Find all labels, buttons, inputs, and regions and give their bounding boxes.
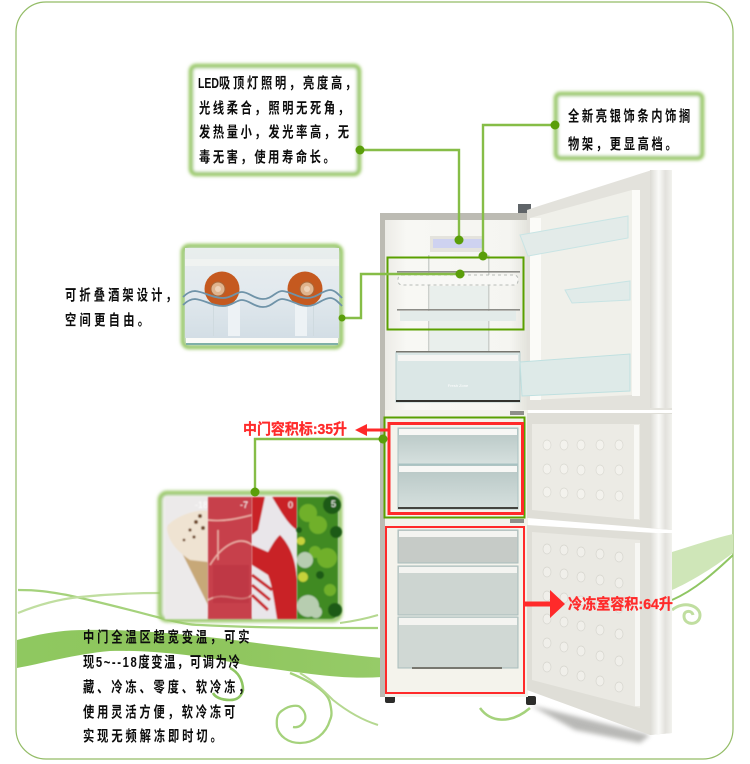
glass shelves xyxy=(397,271,520,321)
door shadow xyxy=(530,705,650,743)
middle door xyxy=(527,413,672,530)
callout: LED light: 发热量小，发光率高，无 xyxy=(199,122,349,140)
photo: coffee: -18 xyxy=(195,500,208,510)
wine rack wires xyxy=(183,290,342,307)
top compartment interior xyxy=(385,220,527,410)
text: wine rack description: 可折叠酒架设计， xyxy=(65,285,177,303)
highlight frame: middle compartment red xyxy=(389,424,522,514)
text: wine rack description xyxy=(65,285,177,328)
ceiling LED light xyxy=(430,236,484,252)
wine bottle right xyxy=(288,272,322,306)
middle drawers xyxy=(398,428,518,509)
text: middle zone description xyxy=(83,627,250,744)
door shelf bottom xyxy=(520,354,630,396)
photo: meat xyxy=(208,497,252,619)
connector: LED light xyxy=(360,150,459,240)
rear rails xyxy=(428,255,490,355)
fridge feet xyxy=(385,694,536,705)
text: middle zone description: 中门全温区超宽变温，可实 xyxy=(83,627,250,645)
callout: LED light: 光线柔合，照明无死角， xyxy=(199,98,349,116)
connector: wine rack xyxy=(342,274,460,318)
callout: LED light: LED xyxy=(198,74,219,91)
top crisper drawer xyxy=(396,351,520,402)
callout: silver trim shelf: 全新亮银饰条内饰搁 xyxy=(568,106,690,124)
refrigerator xyxy=(380,170,672,743)
hinge xyxy=(510,204,531,523)
cabinet top and side trim xyxy=(380,213,528,697)
text: middle zone description: 使用灵活方便，软冷冻可 xyxy=(83,702,235,720)
wine bottle left xyxy=(204,272,240,306)
decorative green swirl background xyxy=(17,534,733,743)
photo: lobster: 0 xyxy=(288,500,293,510)
door dimples xyxy=(543,440,623,501)
photo: broccoli xyxy=(296,496,342,619)
door shelf middle xyxy=(565,281,630,303)
photo: coffee xyxy=(165,497,208,619)
cabinet body xyxy=(380,213,528,697)
highlight frame: middle compartment green xyxy=(384,418,524,518)
highlight frame: freezer xyxy=(386,527,524,693)
connector: zone drawers xyxy=(255,439,383,492)
text: middle zone description: 实现无频解冻即时切。 xyxy=(83,726,222,744)
callout: LED light xyxy=(191,66,359,174)
connector: shelf trim xyxy=(483,125,555,256)
door shelf top xyxy=(520,216,628,256)
text: wine rack description: 空间更自由。 xyxy=(65,310,149,328)
text: middle zone description: 藏、冷冻、零度、软冷冻， xyxy=(83,677,250,695)
callout: LED light: 吸顶灯照明，亮度高， xyxy=(219,73,356,91)
top door xyxy=(520,170,672,410)
label: middle volume: 中门容积标:35升 xyxy=(243,420,347,438)
top crisper drawer: Fresh Zone xyxy=(448,383,469,388)
photo: lobster xyxy=(252,497,297,619)
panel: wine rack photo xyxy=(183,246,342,347)
arrow: freezer volume xyxy=(524,590,565,618)
panel: food temperature photo xyxy=(160,493,342,620)
text: middle zone description: 现5~--18度变温，可调为冷 xyxy=(83,652,240,670)
photo: meat: -7 xyxy=(240,500,248,510)
freezer door dimples xyxy=(543,544,623,692)
rear grid panel xyxy=(430,286,488,352)
label: freezer volume: 冷冻室容积:64升 xyxy=(568,595,673,613)
connector lines and dots xyxy=(250,120,560,496)
freezer door xyxy=(527,525,672,735)
callout: silver trim shelf xyxy=(556,94,702,158)
callout: LED light: 毒无害，使用寿命长。 xyxy=(199,147,335,165)
arrow: middle volume xyxy=(355,424,388,436)
highlight frame: top shelves xyxy=(388,258,524,330)
callout: silver trim shelf: 物架，更显高档。 xyxy=(568,134,677,152)
photo: broccoli: 5 xyxy=(331,499,336,509)
freezer drawers xyxy=(398,530,518,669)
